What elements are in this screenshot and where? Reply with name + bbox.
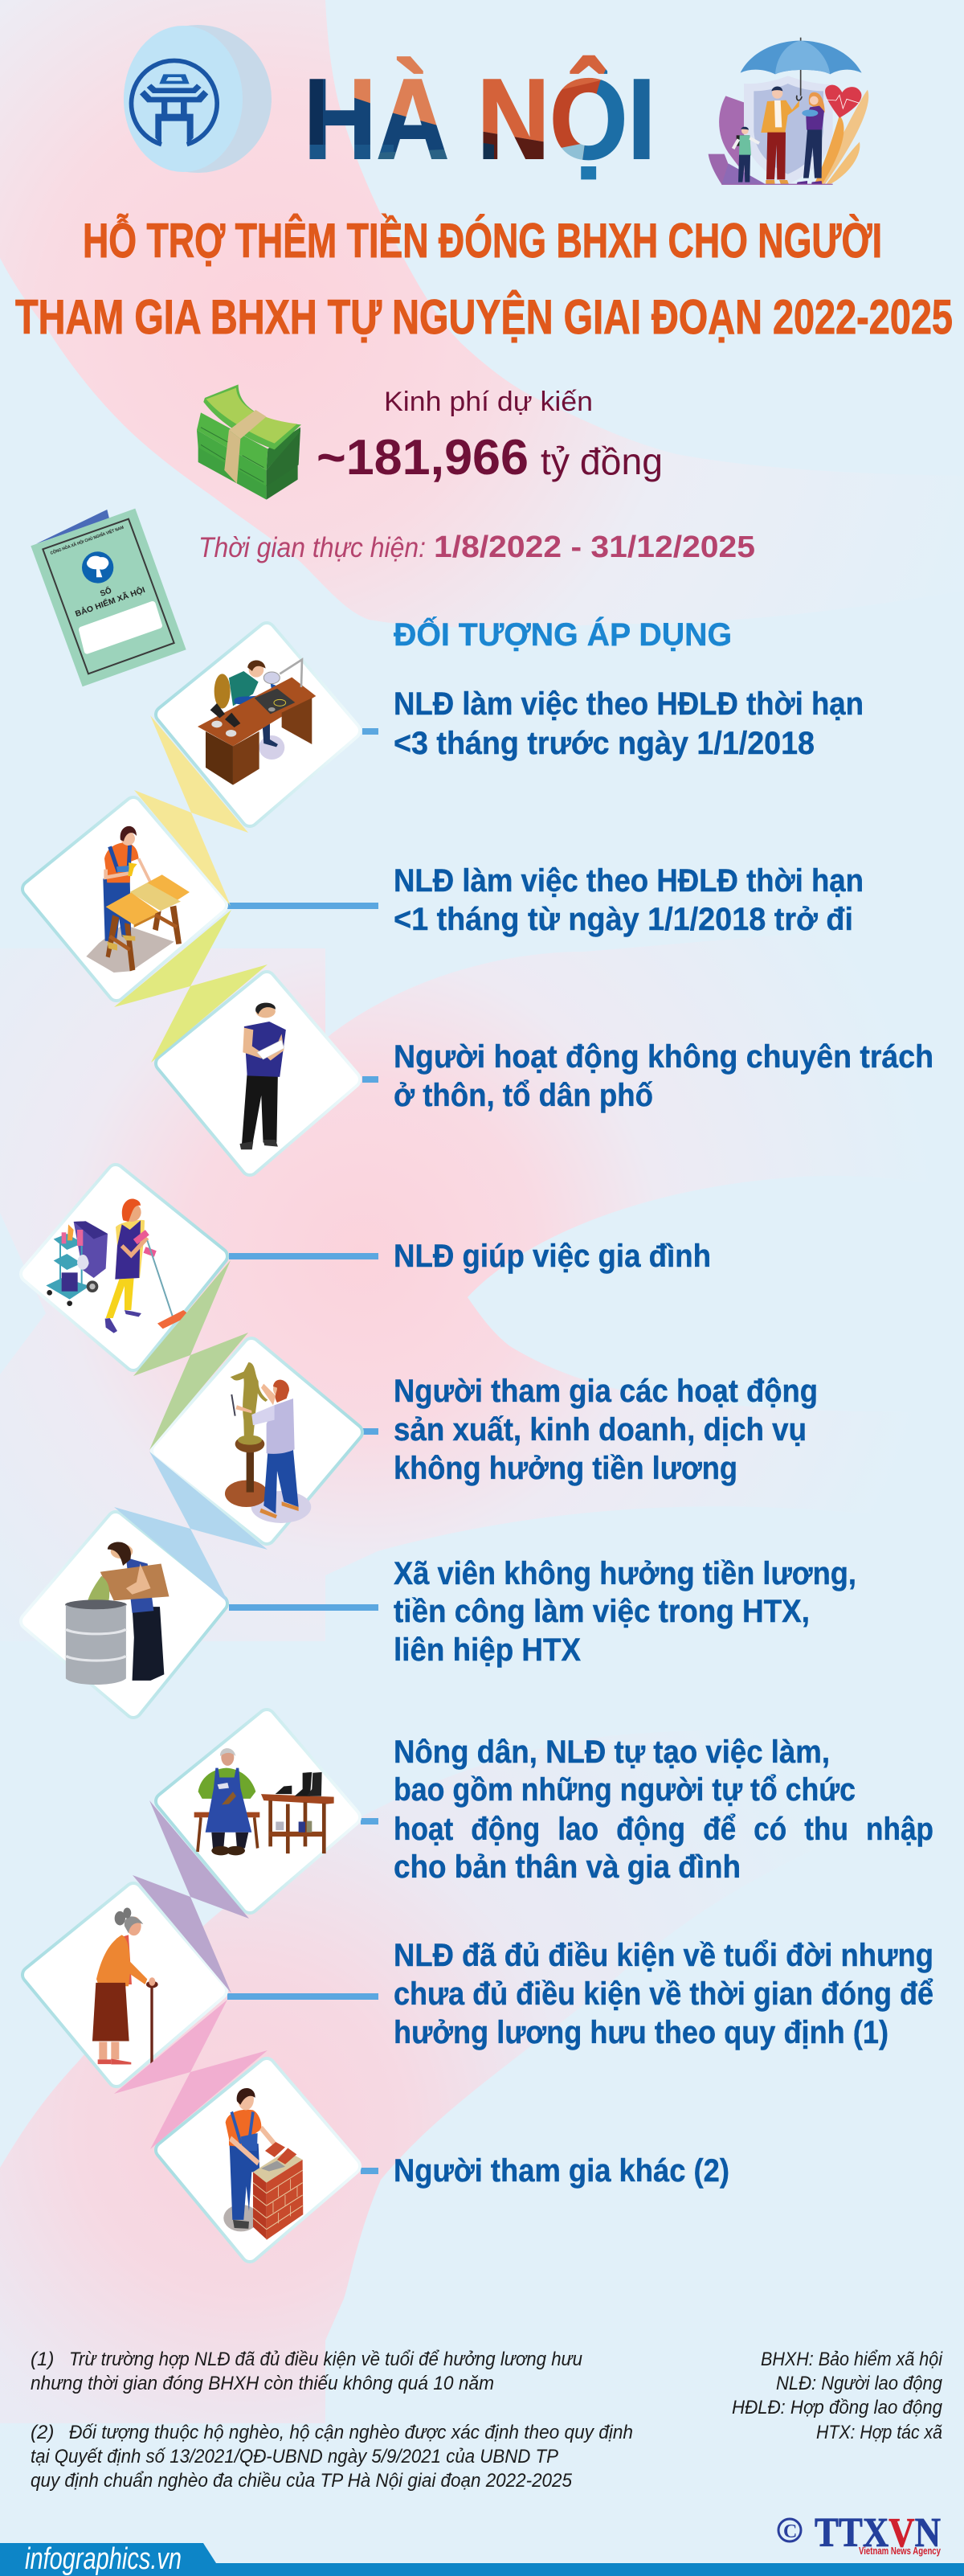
item 7 text: Nông dân, NLĐ tự tạo việc làm, xyxy=(394,1734,830,1770)
implementation time xyxy=(198,530,755,564)
item 7 text: cho bản thân và gia đình xyxy=(394,1849,741,1885)
footnotes: quy định chuẩn nghèo đa chiều của TP Hà Nội giai đoạn 2022-2025 xyxy=(31,2470,573,2492)
icon: stack of money xyxy=(197,384,301,500)
footnotes: Trừ trường hợp NLĐ đã đủ điều kiện về tuổi để hưởng lương hưu xyxy=(69,2349,582,2370)
footer bar: infographics.vn xyxy=(25,2542,182,2576)
diamond 8: elderly woman with cane xyxy=(31,1891,219,2078)
abbreviations: NLĐ: Người lao động xyxy=(776,2373,943,2394)
icon: social insurance book: SỔ xyxy=(99,585,113,599)
heading: target groups: ĐỐI TƯỢNG ÁP DỤNG xyxy=(394,616,732,653)
abbreviations: HTX: Hợp tác xã xyxy=(816,2422,942,2443)
title xyxy=(15,214,953,344)
item 5 text: không hưởng tiền lương xyxy=(394,1451,737,1486)
item 7 text xyxy=(394,1734,933,1885)
main heading: Hà Nội: HÀ xyxy=(304,55,449,183)
abbreviations xyxy=(732,2349,943,2443)
item 3 text: ở thôn, tổ dân phố xyxy=(394,1078,653,1113)
illustration: family under umbrella xyxy=(709,38,868,185)
diamond 2: carpenter xyxy=(31,805,219,993)
item 1 text xyxy=(394,686,864,761)
footnotes: nhưng thời gian đóng BHXH còn thiếu không quá 10 năm xyxy=(31,2373,494,2394)
implementation time: 1/8/2022 - 31/12/2025 xyxy=(434,530,755,564)
item 2 text: <1 tháng từ ngày 1/1/2018 trở đi xyxy=(394,902,853,937)
item 2 text: NLĐ làm việc theo HĐLĐ thời hạn xyxy=(394,863,864,899)
item 3 text xyxy=(394,1039,933,1113)
footer bar xyxy=(0,2542,964,2576)
footnotes: tại Quyết định số 13/2021/QĐ-UBND ngày 5/9/2021 của UBND TP xyxy=(31,2446,558,2467)
item 7 text: bao gồm những người tự tổ chức xyxy=(394,1772,856,1808)
item 6 text: tiền công làm việc trong HTX, xyxy=(394,1594,810,1629)
main heading: Hà Nội xyxy=(304,55,656,183)
icon: social insurance book xyxy=(31,509,186,686)
item 5 text: Người tham gia các hoạt động xyxy=(394,1374,818,1409)
logo: TTXVN: TTXVN xyxy=(815,2510,941,2556)
connector bars xyxy=(227,728,378,2174)
icon: social insurance book: BẢO HIỂM XÃ HỘI xyxy=(74,584,147,619)
diamond 9: bricklayer xyxy=(164,2066,352,2254)
item 6 text: Xã viên không hưởng tiền lương, xyxy=(394,1556,856,1591)
diamond 7: farmer and shoemaker xyxy=(164,1718,352,1905)
funding text: tỷ đồng xyxy=(541,440,663,482)
abbreviations: BHXH: Bảo hiểm xã hội xyxy=(761,2349,943,2370)
footnotes: (1) xyxy=(31,2349,54,2370)
diamond 6: cooperative member xyxy=(29,1520,219,1710)
item 4 text: NLĐ giúp việc gia đình xyxy=(394,1239,711,1274)
item 2 text xyxy=(394,863,864,937)
diamond 1: jeweller at desk xyxy=(164,631,352,818)
item 8 text: hưởng lương hưu theo quy định (1) xyxy=(394,2015,888,2050)
footnotes: Đối tượng thuộc hộ nghèo, hộ cận nghèo được xác định theo quy định xyxy=(69,2422,633,2443)
footnotes xyxy=(31,2349,633,2492)
item 6 text: liên hiệp HTX xyxy=(394,1632,581,1668)
funding text: Kinh phí dự kiến xyxy=(384,387,593,417)
diamond 4: house cleaner xyxy=(29,1173,219,1362)
item 8 text xyxy=(394,1938,933,2050)
main heading: Hà Nội: NỘI xyxy=(477,55,656,183)
logo: Hanoi emblem xyxy=(124,25,272,173)
item 5 text: sản xuất, kinh doanh, dịch vụ xyxy=(394,1412,807,1448)
funding text xyxy=(317,387,663,485)
item 3 text: Người hoạt động không chuyên trách xyxy=(394,1039,933,1075)
icon: social insurance book: CỘNG HÒA XÃ HỘI CHỦ NGHĨA VIỆT NAM xyxy=(49,524,125,556)
connector ribbons between diamonds xyxy=(114,715,268,2149)
diamond 5: sculptor xyxy=(160,1346,354,1536)
footnotes: (2) xyxy=(31,2422,54,2443)
logo: TTXVN: C xyxy=(783,2521,797,2542)
item 6 text xyxy=(394,1556,856,1668)
implementation time: Thời gian thực hiện: xyxy=(198,532,426,563)
abbreviations: HĐLĐ: Hợp đồng lao động xyxy=(732,2397,943,2418)
item 1 text: <3 tháng trước ngày 1/1/2018 xyxy=(394,726,815,761)
funding text: ~181,966 xyxy=(317,430,529,485)
item 5 text xyxy=(394,1374,818,1486)
item 9 text: Người tham gia khác (2) xyxy=(394,2153,729,2189)
item 1 text: NLĐ làm việc theo HĐLĐ thời hạn xyxy=(394,686,864,722)
diamond 3: village officer xyxy=(164,980,352,1167)
